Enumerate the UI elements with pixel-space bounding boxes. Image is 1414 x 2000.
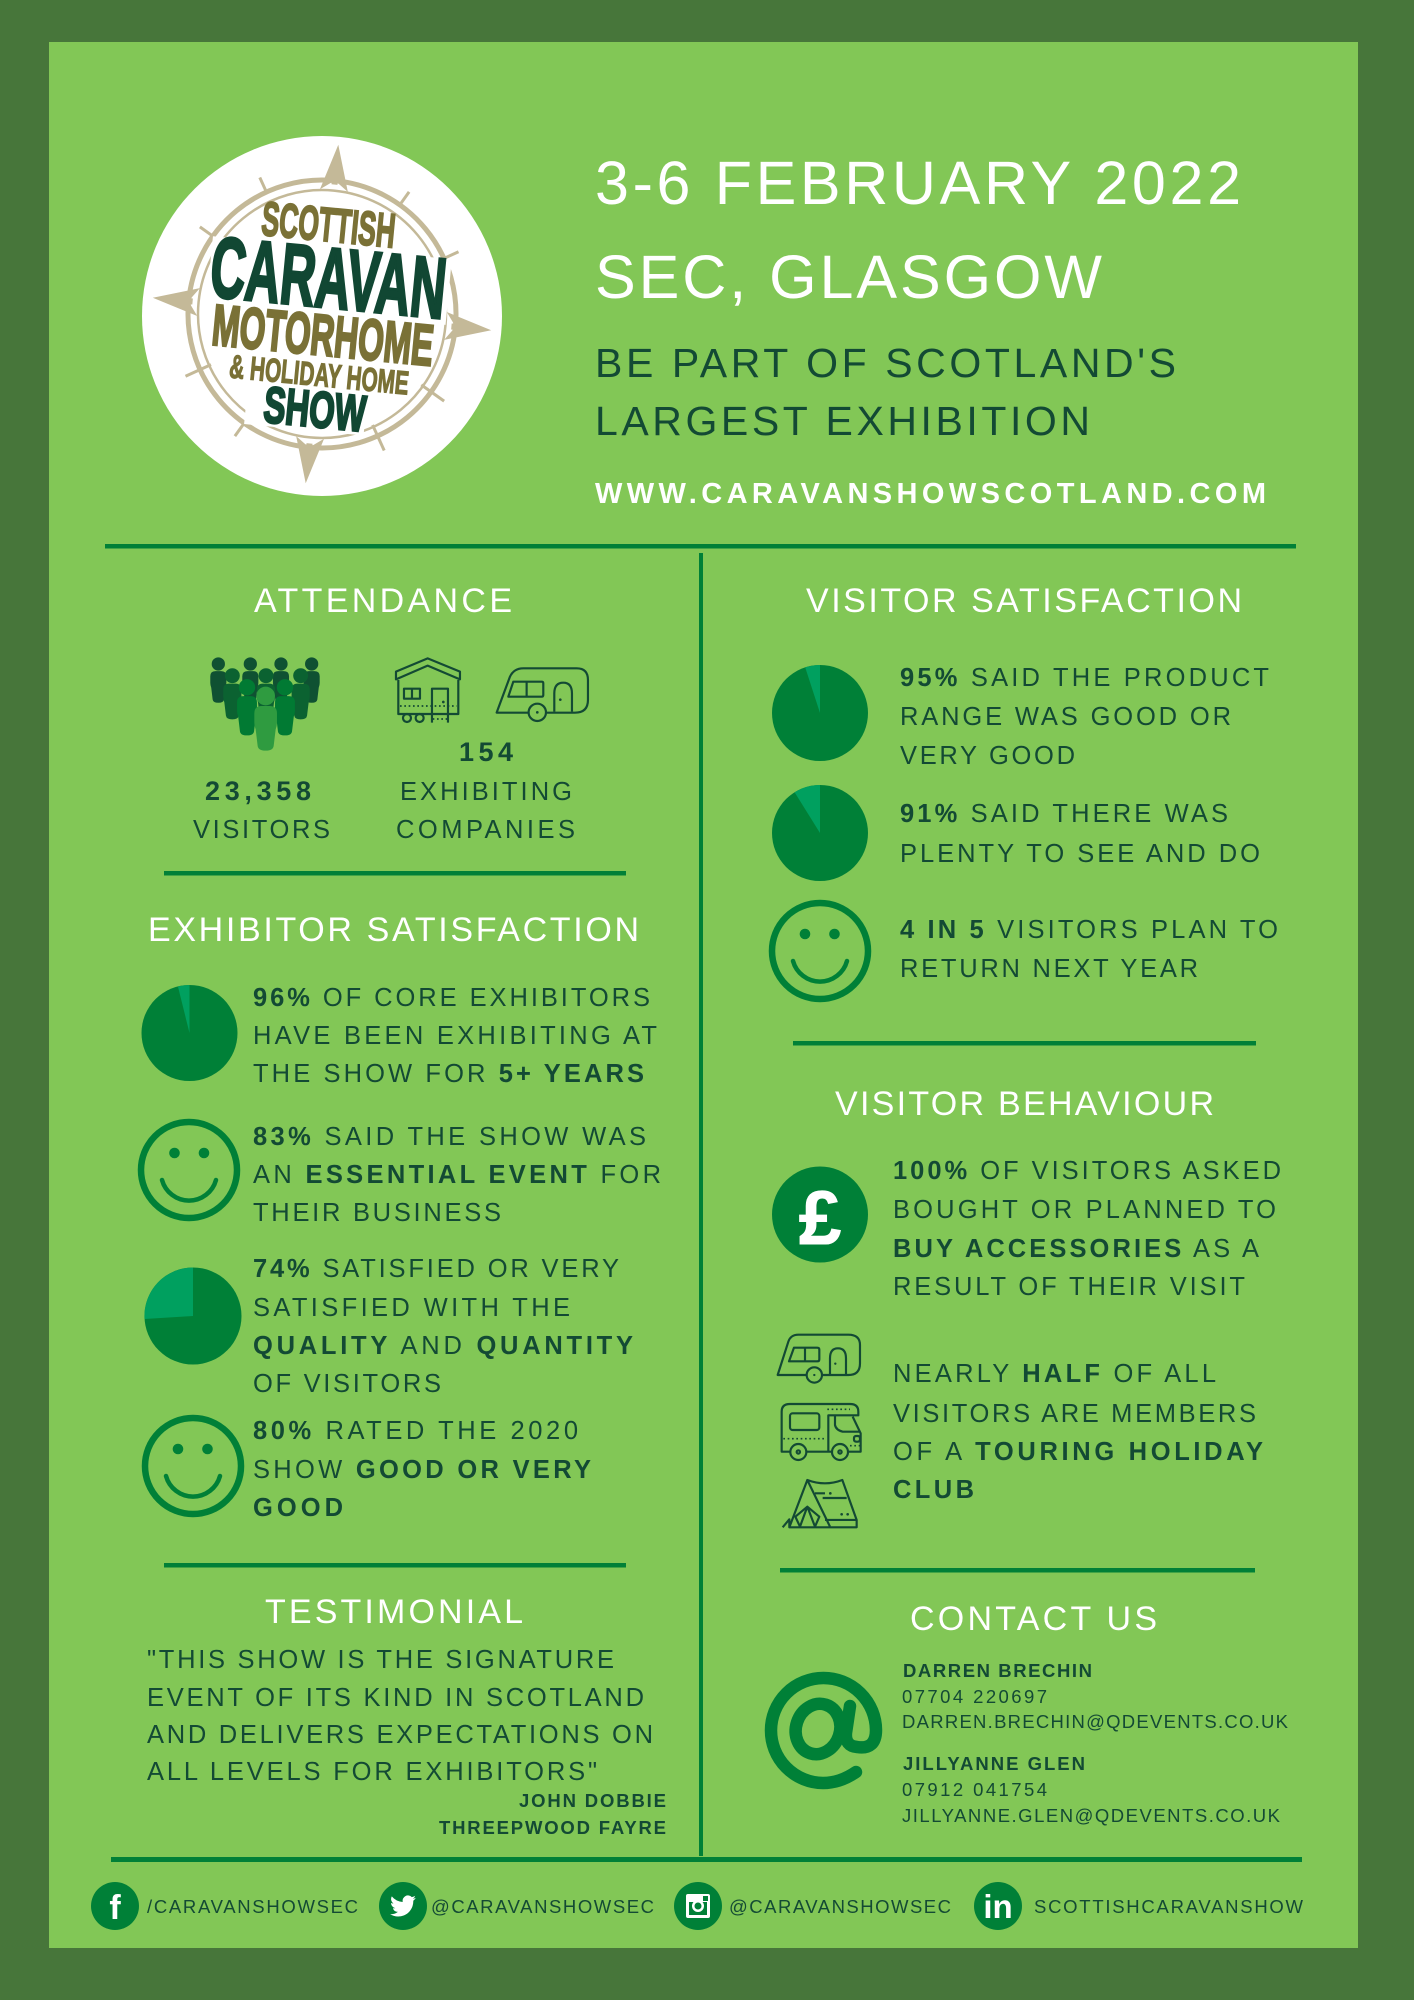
heading: visitor satisfaction: VISITOR SATISFACTION: [806, 582, 1242, 620]
contact: jillyanne glen: JILLYANNE GLEN: [903, 1753, 1085, 1774]
text: 91 percent: 91% SAID THERE WAS: [900, 800, 1228, 828]
pie: 95 percent: [772, 665, 868, 761]
text: 80 percent: GOOD: [253, 1494, 343, 1522]
logo: & HOLIDAY HOME: [228, 347, 411, 402]
linkedin: SCOTTISHCARAVANSHOW: [1034, 1896, 1304, 1917]
text: 74 percent: [253, 1255, 633, 1398]
text: touring club: NEARLY HALF OF ALL: [893, 1360, 1216, 1388]
text: 91 percent: [900, 800, 1260, 868]
text: touring club: [893, 1360, 1263, 1504]
attribution: [439, 1790, 666, 1838]
visitors stat: 23,358: [205, 776, 311, 806]
text: 74 percent: SATISFIED WITH THE: [253, 1294, 570, 1322]
date: 3-6 FEBRUARY 2022: [595, 149, 1241, 217]
heading: testimonial: TESTIMONIAL: [265, 1593, 523, 1631]
heading: attendance: ATTENDANCE: [254, 582, 512, 620]
text: 83 percent: [253, 1123, 661, 1227]
quote: AND DELIVERS EXPECTATIONS ON: [147, 1721, 653, 1749]
exhibitors stat: COMPANIES: [396, 816, 575, 844]
text: 74 percent: OF VISITORS: [253, 1370, 441, 1398]
panel: exhibitor satisfaction: [141, 911, 661, 1522]
contact: darren brechin: DARREN.BRECHIN@QDEVENTS.CO.UK: [902, 1711, 1289, 1732]
text: 95 percent: 95% SAID THE PRODUCT: [900, 664, 1269, 692]
text: accessories: BUY ACCESSORIES AS A: [893, 1235, 1259, 1263]
contact: jillyanne glen: JILLYANNE.GLEN@QDEVENTS.CO.UK: [902, 1805, 1281, 1826]
contact: darren brechin: DARREN BRECHIN: [903, 1660, 1092, 1681]
logo: CARAVAN: [206, 219, 450, 338]
text: 83 percent: 83% SAID THE SHOW WAS: [253, 1123, 646, 1151]
facebook: /CARAVANSHOWSEC: [147, 1896, 358, 1917]
icon: holiday home: [396, 658, 460, 723]
text: 83 percent: THEIR BUSINESS: [253, 1199, 501, 1227]
tagline: BE PART OF SCOTLAND'S: [595, 340, 1176, 386]
text: 91 percent: PLENTY TO SEE AND DO: [900, 840, 1260, 868]
exhibitors stat: EXHIBITING: [400, 778, 572, 806]
panel: social media: [91, 1882, 1304, 1930]
text: 4 in 5: RETURN NEXT YEAR: [900, 955, 1198, 983]
logo: SCOTTISH: [259, 193, 398, 259]
quote: "THIS SHOW IS THE SIGNATURE: [147, 1646, 614, 1674]
twitter: @CARAVANSHOWSEC: [431, 1896, 654, 1917]
text: 95 percent: VERY GOOD: [900, 742, 1075, 770]
icon: smiley 80 percent: [145, 1418, 241, 1514]
icon: caravan: [497, 668, 588, 721]
contact: darren brechin: 07704 220697: [902, 1686, 1047, 1707]
linkedin: in: [983, 1888, 1013, 1925]
contact: jillyanne glen: 07912 041754: [902, 1779, 1047, 1800]
text: 4 in 5: [900, 916, 1278, 983]
pie: 96 percent: [142, 985, 238, 1081]
attribution: JOHN DOBBIE: [519, 1790, 666, 1811]
text: accessories: BOUGHT OR PLANNED TO: [893, 1196, 1276, 1224]
contact: jillyanne glen: [902, 1753, 1281, 1826]
icon: motorhome: [782, 1404, 861, 1460]
panel: visitor behaviour: [772, 1085, 1281, 1527]
text: 80 percent: SHOW GOOD OR VERY: [253, 1456, 591, 1484]
icon: pound coin: £: [799, 1176, 841, 1261]
icon: at sign: [771, 1678, 876, 1783]
instagram: [674, 1882, 951, 1930]
text: 96 percent: [253, 984, 657, 1088]
panel: attendance: [193, 582, 588, 844]
twitter: [379, 1882, 654, 1930]
icon: smiley 4 in 5: [772, 903, 868, 999]
text: touring club: VISITORS ARE MEMBERS: [893, 1400, 1256, 1428]
text: 74 percent: 74% SATISFIED OR VERY: [253, 1255, 619, 1283]
exhibitors stat: 154: [459, 737, 513, 767]
text: 74 percent: QUALITY AND QUANTITY: [253, 1332, 633, 1360]
icon: crowd of people: [210, 657, 320, 751]
website: WWW.CARAVANSHOWSCOTLAND.COM: [595, 478, 1266, 510]
visitors stat: VISITORS: [193, 816, 330, 844]
text: 95 percent: [900, 664, 1269, 770]
heading: contact us: CONTACT US: [910, 1600, 1157, 1638]
text: 95 percent: RANGE WAS GOOD OR: [900, 703, 1231, 731]
icon: pound coin: [772, 1166, 868, 1262]
heading: exhibitor satisfaction: EXHIBITOR SATISFACTION: [148, 911, 639, 949]
dividers: [105, 544, 1302, 1862]
tagline: [595, 340, 1176, 444]
text: touring club: OF A TOURING HOLIDAY: [893, 1438, 1263, 1466]
icon: tent: [783, 1480, 857, 1527]
panel: testimonial: [147, 1593, 666, 1838]
text: 83 percent: AN ESSENTIAL EVENT FOR: [253, 1161, 661, 1189]
text: accessories: [893, 1157, 1281, 1301]
panel: visitor satisfaction: [772, 582, 1278, 999]
text: 80 percent: 80% RATED THE 2020: [253, 1417, 578, 1445]
attribution: THREEPWOOD FAYRE: [439, 1817, 666, 1838]
logo: SHOW: [261, 376, 369, 443]
instagram: @CARAVANSHOWSEC: [729, 1896, 951, 1917]
text: accessories: RESULT OF THEIR VISIT: [893, 1273, 1245, 1301]
quote: [147, 1646, 653, 1786]
facebook: f: [109, 1889, 121, 1927]
visitors stat: [193, 776, 330, 844]
header text: [595, 149, 1266, 510]
text: 96 percent: THE SHOW FOR 5+ YEARS: [253, 1060, 644, 1088]
panel: contact us: [771, 1600, 1289, 1826]
facebook: [91, 1882, 358, 1930]
logo: [136, 128, 508, 500]
tagline: LARGEST EXHIBITION: [595, 398, 1090, 444]
heading: visitor behaviour: VISITOR BEHAVIOUR: [835, 1085, 1214, 1123]
linkedin: [974, 1882, 1304, 1930]
contact: darren brechin: [902, 1660, 1289, 1732]
icon: touring caravan: [778, 1335, 860, 1383]
quote: ALL LEVELS FOR EXHIBITORS": [147, 1758, 597, 1786]
quote: EVENT OF ITS KIND IN SCOTLAND: [147, 1684, 644, 1712]
pie: 74 percent: [144, 1267, 242, 1364]
text: 96 percent: HAVE BEEN EXHIBITING AT: [253, 1022, 657, 1050]
venue: SEC, GLASGOW: [595, 243, 1102, 311]
exhibitors stat: [396, 737, 575, 844]
logo: MOTORHOME: [209, 293, 437, 379]
text: accessories: 100% OF VISITORS ASKED: [893, 1157, 1281, 1185]
text: 96 percent: 96% OF CORE EXHIBITORS: [253, 984, 650, 1012]
text: touring club: CLUB: [893, 1476, 974, 1504]
pie: 91 percent: [772, 785, 868, 881]
text: 80 percent: [253, 1417, 591, 1522]
icon: smiley 83 percent: [141, 1122, 237, 1218]
text: 4 in 5: 4 IN 5 VISITORS PLAN TO: [900, 916, 1278, 944]
